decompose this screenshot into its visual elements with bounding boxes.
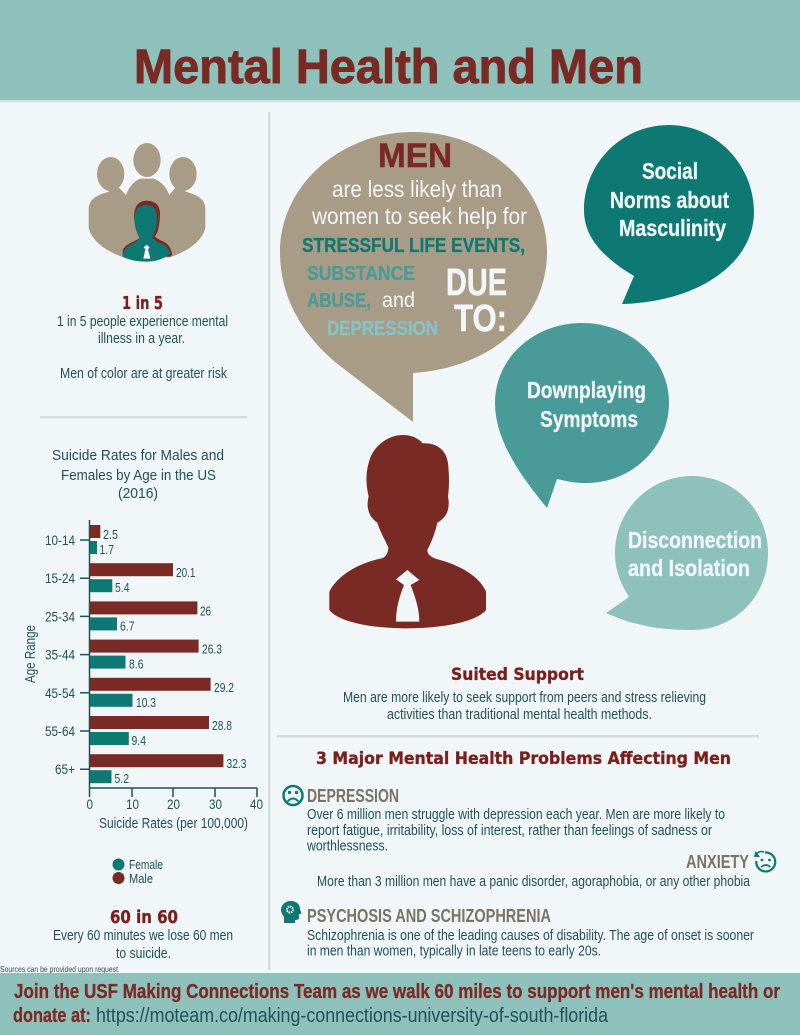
x axis labels: 0: [86, 797, 93, 812]
text: donation url: https://moteam.co/making-connections-university-of-south-florida: [96, 1005, 609, 1027]
text: substance abuse and depression: and: [382, 289, 415, 312]
panel: suited support: [343, 665, 706, 723]
speech bubble: social norms: Social: [642, 158, 698, 184]
text: donate at: donate at:: [13, 1005, 91, 1027]
heading: 60 in 60: 60 in 60: [110, 907, 178, 928]
speech bubble: downplaying symptoms: Symptoms: [540, 406, 638, 432]
text: suited support description: [343, 690, 706, 723]
female bars: [90, 541, 132, 783]
text: substance abuse and depression: [307, 263, 438, 340]
panel: 3 major mental health problems: [281, 749, 775, 960]
text: schizophrenia description: [307, 928, 754, 960]
sources note: Sources can be provided upon request: [0, 964, 119, 974]
age labels: 35-44: [45, 648, 75, 663]
text: 60 in 60 description: to suicide.: [116, 946, 171, 962]
speech bubble: disconnection and isolation: Disconnection: [628, 527, 762, 553]
heading: anxiety: ANXIETY: [686, 852, 749, 872]
text: substance abuse and depression: SUBSTANCE: [307, 263, 415, 285]
chart title: [52, 447, 224, 502]
age labels: 25-34: [45, 609, 75, 624]
text: less likely to seek help: are less likely than: [332, 176, 502, 202]
header band with title: [0, 0, 800, 100]
female value labels: 1.7: [100, 543, 114, 557]
icon: group of people with highlighted person: [89, 143, 205, 262]
text: 60 in 60 description: Every 60 minutes we lose 60 men: [53, 928, 233, 944]
panel: 60 in 60 statistic: [53, 907, 233, 962]
male value labels: 32.3: [226, 757, 247, 771]
x axis labels: 30: [209, 797, 222, 812]
text: schizophrenia description: in men than women, typically in late teens to early 20s.: [307, 944, 601, 960]
text: suited support description: activities than traditional mental health methods.: [387, 707, 652, 723]
text: due to: DUE: [446, 262, 507, 304]
icon: sad face: [284, 786, 302, 805]
heading: psychosis and schizophrenia: PSYCHOSIS AND SCHIZOPHRENIA: [307, 906, 551, 926]
text: stressful life events: STRESSFUL LIFE EVENTS,: [302, 235, 525, 257]
legend: Female: [129, 858, 163, 872]
speech bubble: disconnection and isolation: [606, 476, 768, 630]
text: less likely to seek help: women to seek help for: [311, 203, 527, 229]
male value labels: 29.2: [214, 681, 234, 695]
male value labels: [103, 528, 247, 771]
male value labels: 26: [200, 604, 211, 618]
speech bubble: social norms: [584, 125, 754, 304]
female value labels: 6.7: [120, 619, 135, 633]
age labels: 45-54: [45, 686, 75, 701]
x axis labels: 40: [250, 797, 263, 812]
male value labels: 20.1: [176, 566, 196, 580]
text: substance abuse and depression: DEPRESSION: [327, 318, 438, 340]
male value labels: 26.3: [202, 643, 222, 657]
panel: 1 in 5 statistic: [57, 143, 228, 382]
female value labels: 5.2: [114, 772, 129, 786]
footer call to action: [0, 973, 800, 1035]
age labels: 65+: [55, 762, 75, 777]
axes: [80, 520, 257, 797]
bar chart: [23, 520, 263, 832]
text: 1 in 5 description: Men of color are at greater risk: [60, 366, 228, 382]
text: 60 in 60 description: [53, 928, 233, 962]
text: less likely to seek help: [311, 176, 527, 229]
heading: 3 major problems: 3 Major Mental Health Problems Affecting Men: [316, 749, 731, 769]
text: 1 in 5 description: illness in a year.: [98, 331, 185, 347]
y axis title: Age Range: [23, 625, 39, 683]
age labels: 55-64: [45, 724, 75, 739]
speech bubble: disconnection and isolation: and Isolation: [628, 555, 750, 581]
speech bubble: social norms: Norms about: [610, 187, 729, 213]
speech bubble: social norms: Masculinity: [619, 215, 726, 241]
heading: 1 in 5: 1 in 5: [122, 293, 163, 314]
male value labels: 28.8: [212, 719, 232, 733]
text: depression description: report fatigue, irritability, loss of interest, rather than feelings of sadness or: [307, 823, 712, 839]
heading: MEN: MEN: [378, 137, 452, 175]
chart title: Suicide Rates for Males and: [52, 447, 224, 464]
speech bubble: downplaying symptoms: Downplaying: [527, 377, 646, 403]
x axis labels: [86, 797, 263, 812]
text: substance abuse and depression: ABUSE,: [307, 290, 371, 312]
x axis labels: 10: [126, 797, 139, 812]
age labels: [45, 533, 75, 777]
text: depression description: worthlessness.: [306, 838, 388, 854]
legend: [112, 858, 163, 886]
icon: man in suit and tie: [329, 435, 486, 628]
title: Mental Health and Men: [134, 41, 643, 94]
heading: suited support: Suited Support: [451, 665, 584, 685]
chart title: Females by Age in the US: [61, 467, 216, 484]
x axis title: Suicide Rates (per 100,000): [99, 816, 248, 832]
female value labels: 5.4: [115, 581, 130, 595]
male value labels: 2.5: [103, 528, 118, 542]
heading: depression: DEPRESSION: [307, 786, 399, 806]
speech bubble: men are less likely: [280, 132, 547, 422]
speech bubble: downplaying symptoms: [495, 323, 669, 508]
legend: Male: [129, 872, 153, 886]
text: due to: TO:: [454, 298, 507, 340]
male bars: [90, 525, 223, 767]
age labels: 10-14: [45, 533, 75, 548]
chart title: (2016): [118, 485, 158, 502]
female value labels: 9.4: [132, 734, 146, 748]
x axis labels: 20: [167, 797, 180, 812]
icon: anxious face: [754, 851, 775, 871]
panel: suicide rates bar chart: [23, 447, 263, 886]
female value labels: [100, 543, 156, 786]
text: suited support description: Men are more likely to seek support from peers and stress relieving: [343, 690, 706, 706]
female value labels: 10.3: [136, 696, 156, 710]
text: 1 in 5 description: 1 in 5 people experience mental: [57, 314, 228, 330]
text: 1 in 5 description: [57, 314, 228, 382]
text: due to: [446, 262, 507, 340]
icon: head with gear: [281, 901, 302, 923]
female value labels: 8.6: [129, 658, 144, 672]
text: depression description: [306, 807, 725, 854]
age labels: 15-24: [45, 571, 75, 586]
text: depression description: Over 6 million men struggle with depression each year. Men are more likely to: [307, 807, 725, 823]
